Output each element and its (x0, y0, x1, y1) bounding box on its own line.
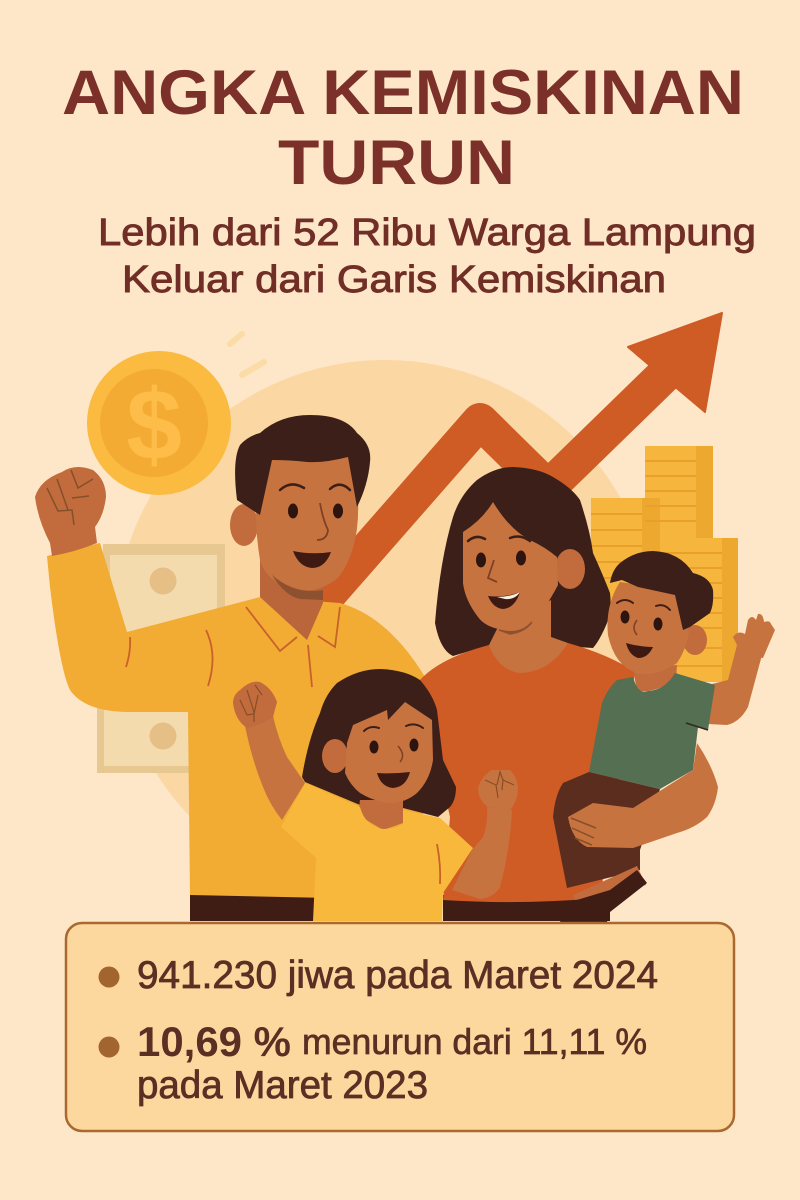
father hair (235, 415, 370, 515)
father face (256, 452, 358, 591)
boy eyes (620, 610, 662, 630)
statistic: people in poverty: 941.230 jiwa pada Maret 2024 (137, 954, 658, 997)
boy face (608, 582, 689, 674)
mother neck shadow (499, 622, 532, 634)
title: ANGKA KEMISKINAN (62, 58, 744, 128)
father trousers (190, 893, 320, 921)
girl right arm (452, 807, 512, 899)
girl right fist (478, 770, 518, 810)
subtitle: Keluar dari Garis Kemiskinan (122, 259, 666, 301)
boy nose (634, 620, 637, 635)
father mouth (293, 551, 331, 568)
mother face (463, 502, 558, 630)
boy shoes (560, 870, 647, 922)
father nose (317, 503, 328, 540)
father shirt fold lines (126, 607, 340, 687)
father ear (230, 504, 258, 546)
boy calf (573, 866, 646, 900)
girl eyes (370, 738, 418, 754)
subtitle: Lebih dari 52 Ribu Warga Lampung (98, 212, 756, 254)
icon: dollar coin: $ (126, 369, 182, 481)
boy sleeve crease (686, 723, 708, 730)
boy shirt (589, 673, 715, 789)
girl shirt crease (437, 844, 440, 884)
girl nose (398, 746, 403, 762)
girl left fist (233, 682, 277, 728)
mother nose (488, 560, 497, 582)
figure: mother (420, 467, 635, 921)
icon: coin stacks (591, 446, 738, 682)
girl face (345, 702, 433, 803)
subtitle (98, 212, 756, 301)
arrow: rising trend (318, 313, 722, 606)
mother shirt (420, 643, 635, 902)
statistic: comparison: menurun dari 11,11 % (302, 1021, 647, 1062)
boy brows (617, 600, 670, 610)
father shirt (47, 543, 428, 900)
father neck (260, 560, 323, 640)
girl neck (358, 800, 403, 830)
background sun circle (115, 360, 655, 900)
father neck shadow (272, 575, 323, 600)
boy trousers (553, 772, 660, 888)
boy neck (633, 665, 677, 691)
mother ear (555, 549, 585, 589)
mother trousers (443, 895, 610, 921)
statistic: comparison date: pada Maret 2023 (137, 1064, 428, 1107)
statistic: percentage: 10,69 % (137, 1018, 291, 1065)
father fist (35, 467, 106, 556)
mother holding arm (568, 743, 718, 848)
icon: banknotes (97, 544, 225, 773)
title: TURUN (278, 128, 515, 198)
mother mouth (488, 592, 520, 609)
title (62, 58, 744, 198)
girl brows (364, 724, 423, 731)
mother eyes (476, 550, 526, 568)
girl left arm (245, 716, 305, 820)
sparkle marks (230, 334, 264, 375)
mother hair (435, 467, 611, 656)
girl ear (322, 739, 348, 773)
bullet two (98, 1036, 120, 1058)
boy arm (708, 645, 762, 725)
mother brows (468, 537, 530, 541)
boy ear (683, 625, 707, 655)
figure: girl (233, 669, 518, 921)
bullet one (98, 966, 120, 988)
boy mouth (626, 643, 653, 658)
panel: statistics (66, 923, 734, 1131)
boy hand (733, 614, 775, 658)
father eyes (288, 504, 343, 518)
boy hair (610, 551, 713, 630)
icon: dollar coin (87, 351, 231, 495)
girl hair (302, 669, 456, 817)
mother neck (489, 600, 568, 673)
girl shirt (281, 783, 473, 921)
mother teeth (497, 592, 520, 599)
girl mouth (377, 772, 410, 788)
figure: father (35, 415, 428, 921)
figure: boy (553, 551, 775, 922)
father brows (280, 484, 350, 490)
